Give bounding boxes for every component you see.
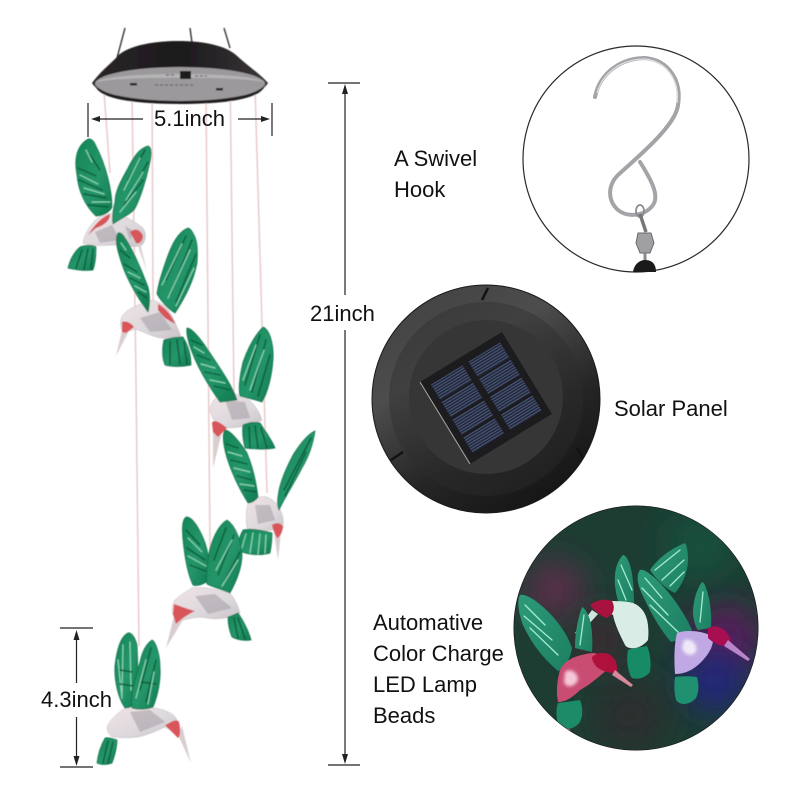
wind chime product (68, 28, 315, 764)
dimension: 21inch height: 21inch (310, 301, 375, 326)
label: automative color charge LED lamp beads (373, 610, 504, 728)
hanging cords (pink strings) (103, 68, 267, 646)
panel: color changing LED photo (373, 506, 760, 753)
label: a swivel hook (394, 146, 477, 202)
glowing bird left (518, 595, 633, 731)
dimension: 5.1inch width (88, 103, 272, 137)
hummingbird 2 (116, 228, 197, 366)
label: a swivel hook: A Swivel (394, 146, 477, 171)
glowing bird right (638, 570, 750, 704)
label: automative color charge LED lamp beads: Color Charge (373, 641, 504, 666)
dimension: 21inch height (310, 83, 375, 765)
solar disc (372, 285, 600, 513)
dimension: 4.3inch height: 4.3inch (41, 687, 112, 712)
hummingbird 3 (187, 327, 275, 468)
icon: S hook (595, 58, 679, 272)
panel: solar panel (372, 285, 728, 513)
dimension: 4.3inch height (41, 628, 112, 767)
hummingbird 1 (68, 139, 151, 272)
panel: swivel hook (394, 46, 749, 272)
label: automative color charge LED lamp beads: Automative (373, 610, 483, 635)
label: automative color charge LED lamp beads: LED Lamp (373, 672, 477, 697)
label: a swivel hook: Hook (394, 177, 446, 202)
label: automative color charge LED lamp beads: Beads (373, 703, 435, 728)
solar lampshade (92, 28, 268, 104)
label: solar panel: Solar Panel (614, 396, 728, 421)
solar cells (420, 332, 552, 464)
glowing bird middle (575, 543, 688, 679)
hummingbird 6 (97, 633, 191, 764)
hummingbird 5 (166, 517, 251, 648)
glow background (514, 506, 760, 753)
dimension: 5.1inch width: 5.1inch (154, 106, 225, 131)
hummingbird 4 (223, 430, 315, 560)
